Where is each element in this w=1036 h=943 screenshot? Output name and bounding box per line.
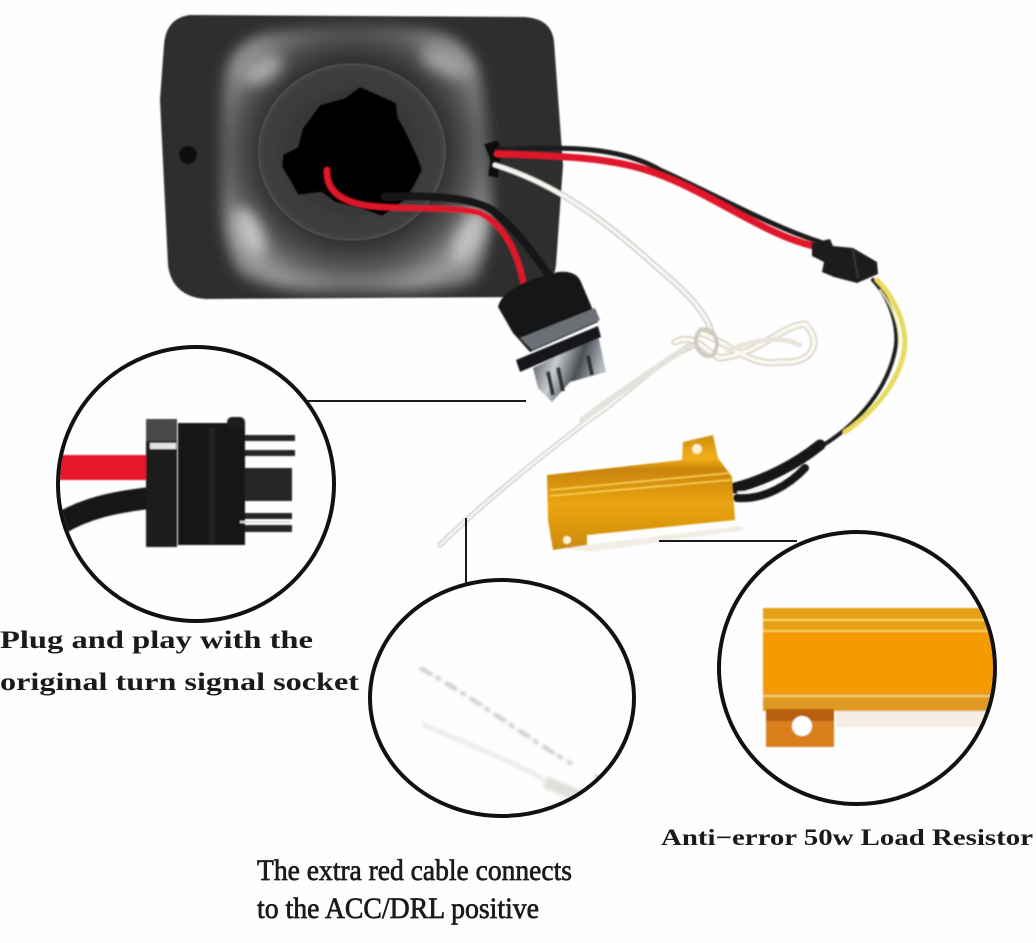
collar top tint <box>146 419 177 441</box>
yellow and black wires <box>735 280 905 498</box>
caption: extra cable <box>257 854 572 925</box>
red cable <box>58 455 150 480</box>
resistor holes <box>563 444 702 544</box>
resistor tab <box>764 720 836 748</box>
plug body magnified <box>178 423 245 545</box>
plug pins magnified <box>245 435 295 532</box>
socket hole <box>282 87 422 216</box>
dish highlights <box>228 40 490 268</box>
mounting hole <box>179 146 197 164</box>
white looped wire <box>440 324 814 545</box>
plug band <box>520 308 600 350</box>
detail circle: white cable <box>370 580 634 816</box>
lower ridge highlight <box>763 695 998 697</box>
caption: extra cable: to the ACC/DRL positive <box>257 892 539 925</box>
reflector dish <box>222 26 491 292</box>
plug collar magnified <box>146 419 177 547</box>
tab top shade <box>766 709 834 721</box>
resistor top ridges <box>763 608 998 632</box>
callout line: resistor <box>659 540 797 542</box>
circle outline <box>370 580 634 816</box>
magnified resistor <box>763 608 998 747</box>
resistor ridge highlight <box>763 620 998 631</box>
caption: plug and play <box>0 627 360 696</box>
lamp housing <box>160 15 563 300</box>
plug collar <box>498 272 598 352</box>
callout line: plug <box>305 400 526 402</box>
magnified plug <box>58 417 295 547</box>
resistor ridge <box>550 473 731 496</box>
red and black lamp wire <box>327 170 560 300</box>
socket plug <box>498 272 606 402</box>
connector <box>812 239 878 283</box>
resistor shadow magnified <box>836 711 986 727</box>
callout line: white cable <box>465 518 467 584</box>
detail circle: plug <box>58 347 334 621</box>
caption: plug and play: original turn signal socket <box>0 669 360 696</box>
plug pins <box>533 335 606 402</box>
connector ridge <box>853 250 858 278</box>
plug latch <box>226 416 246 424</box>
resistor face <box>763 632 998 692</box>
grommet <box>484 140 502 178</box>
detail circle: resistor <box>719 532 998 804</box>
black wire <box>497 148 820 242</box>
resistor lower ridges <box>763 692 998 711</box>
circle outline <box>719 532 995 804</box>
caption: plug and play: Plug and play with the <box>0 627 313 654</box>
white wire <box>495 165 712 335</box>
collar glint <box>150 443 176 449</box>
load resistor <box>547 435 745 552</box>
magnified white cable <box>420 668 605 802</box>
red wire <box>497 154 824 248</box>
resistor shadow <box>560 526 745 552</box>
body groove <box>210 428 214 544</box>
housing plate <box>160 15 563 299</box>
socket disc <box>259 64 445 240</box>
caption: load resistor: Anti−error 50w Load Resistor <box>661 825 1033 850</box>
tab hole <box>792 716 812 736</box>
pin glint <box>240 521 290 523</box>
white wire core <box>495 165 712 335</box>
plug pin detail <box>546 355 594 395</box>
resistor body <box>547 435 735 550</box>
black cable <box>58 498 150 525</box>
circle outline <box>58 347 334 621</box>
plug flange <box>516 326 601 372</box>
side wires to connector <box>495 148 824 335</box>
caption: extra cable: The extra red cable connects <box>257 854 572 887</box>
